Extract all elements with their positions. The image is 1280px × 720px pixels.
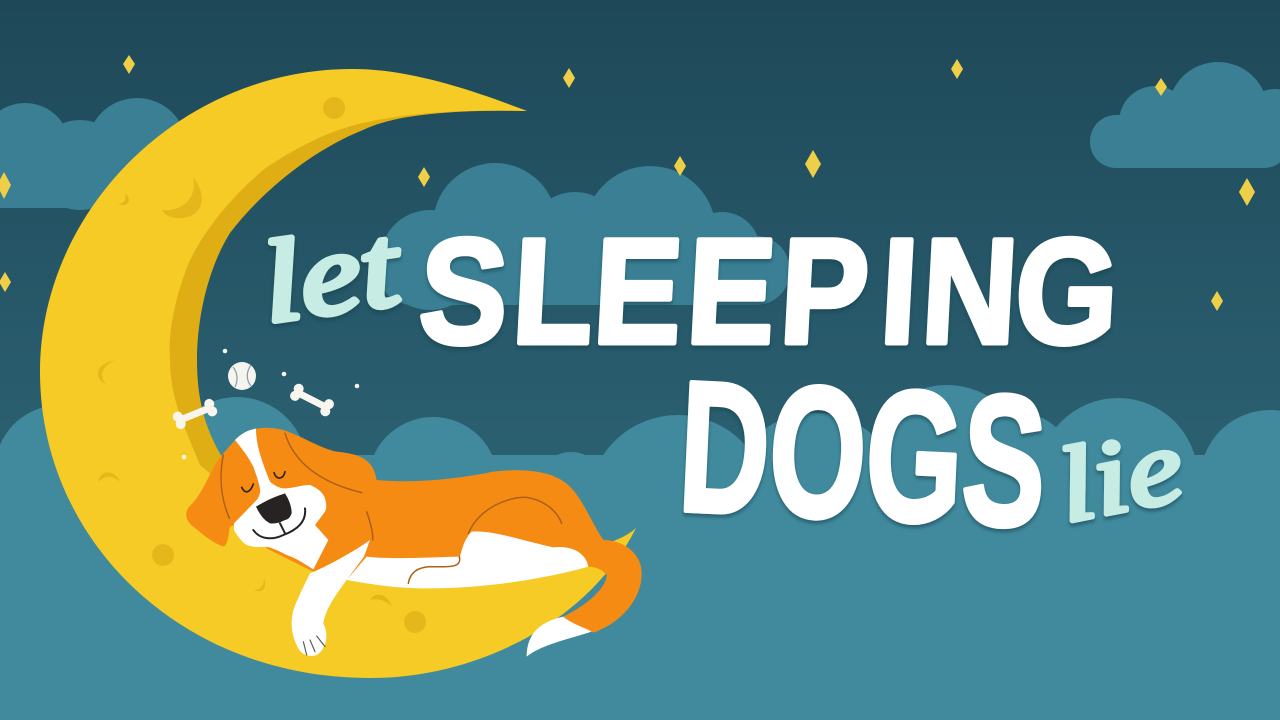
dog paw toes xyxy=(303,636,325,655)
cloud: right xyxy=(1090,62,1280,168)
stars xyxy=(0,55,1255,311)
back clouds xyxy=(0,62,1280,310)
dog body and tail xyxy=(235,428,642,633)
dog mouth xyxy=(253,508,305,538)
dream items xyxy=(171,349,359,459)
sleeping dog xyxy=(186,428,642,657)
bone right xyxy=(288,382,336,418)
dog belly xyxy=(347,531,588,588)
dog face xyxy=(234,429,328,569)
dog nose xyxy=(256,493,292,524)
title word: DOGS: DOGS xyxy=(675,343,1050,567)
moon shaded inner band xyxy=(100,80,527,520)
baseball xyxy=(228,362,256,390)
title word: SLEEPING: SLEEPING xyxy=(415,207,1123,375)
title word: lie: lie xyxy=(1048,406,1192,545)
dog eyes xyxy=(242,472,285,492)
bone left xyxy=(171,397,219,431)
dog tail tip xyxy=(527,617,594,657)
dog floppy left ear xyxy=(186,440,270,547)
sparkles xyxy=(182,349,359,459)
cloud: left xyxy=(0,98,187,210)
cloud: center xyxy=(378,163,790,310)
moon craters xyxy=(96,97,426,633)
title word: let: let xyxy=(254,202,410,348)
moon crescent xyxy=(40,69,636,678)
moon xyxy=(40,69,636,678)
front clouds xyxy=(0,385,1280,720)
title xyxy=(254,202,1192,567)
dog line details xyxy=(221,433,562,583)
dog front leg xyxy=(292,540,370,656)
